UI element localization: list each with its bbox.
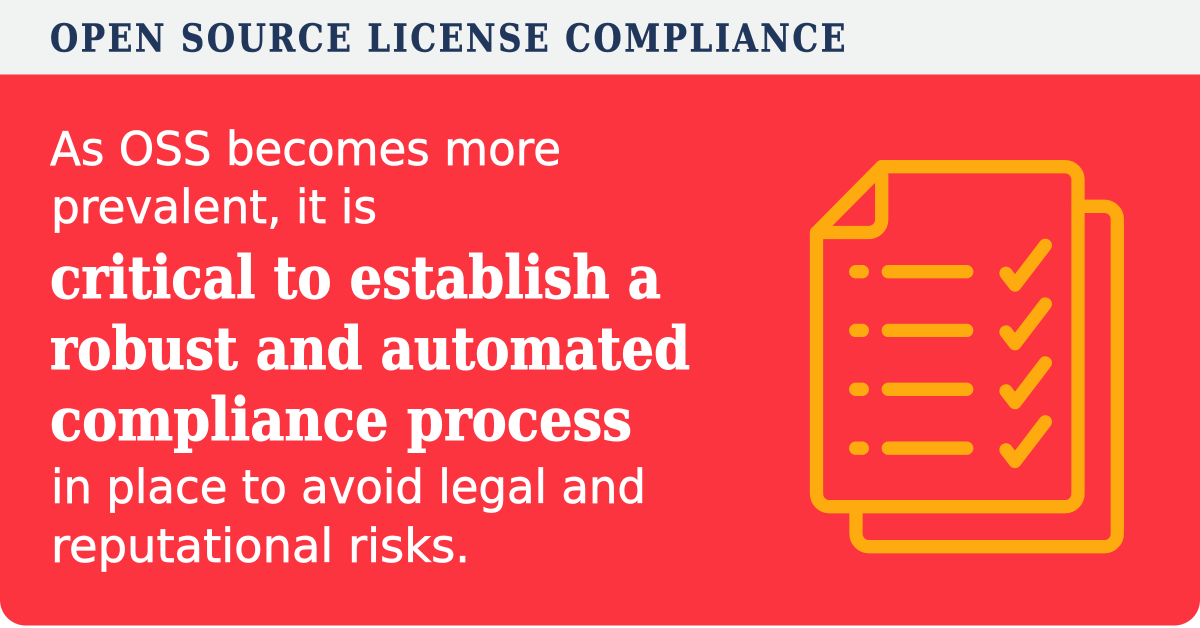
title: OPEN SOURCE LICENSE COMPLIANCE [50, 16, 848, 60]
checklist row 1 [856, 245, 1045, 285]
icon: folded corner [816, 167, 882, 232]
checklist row 3 [856, 363, 1045, 403]
text block: statement [50, 122, 690, 573]
checklist row 2 [856, 304, 1045, 344]
text block: statement: compliance process [50, 385, 632, 454]
text block: statement: critical to establish a [50, 243, 661, 312]
text block: statement: prevalent, it is [51, 180, 377, 234]
icon: back sheet [856, 206, 1117, 547]
text block: statement: As OSS becomes more [50, 122, 561, 176]
text block: statement: reputational risks. [51, 519, 470, 573]
panel: header bar [0, 0, 1200, 75]
checklist row 4 [856, 422, 1045, 462]
icon: checklist documents [816, 167, 1117, 547]
icon: front sheet [816, 167, 1078, 507]
text block: statement: robust and automated [50, 314, 690, 383]
text block: statement: in place to avoid legal and [51, 460, 646, 514]
